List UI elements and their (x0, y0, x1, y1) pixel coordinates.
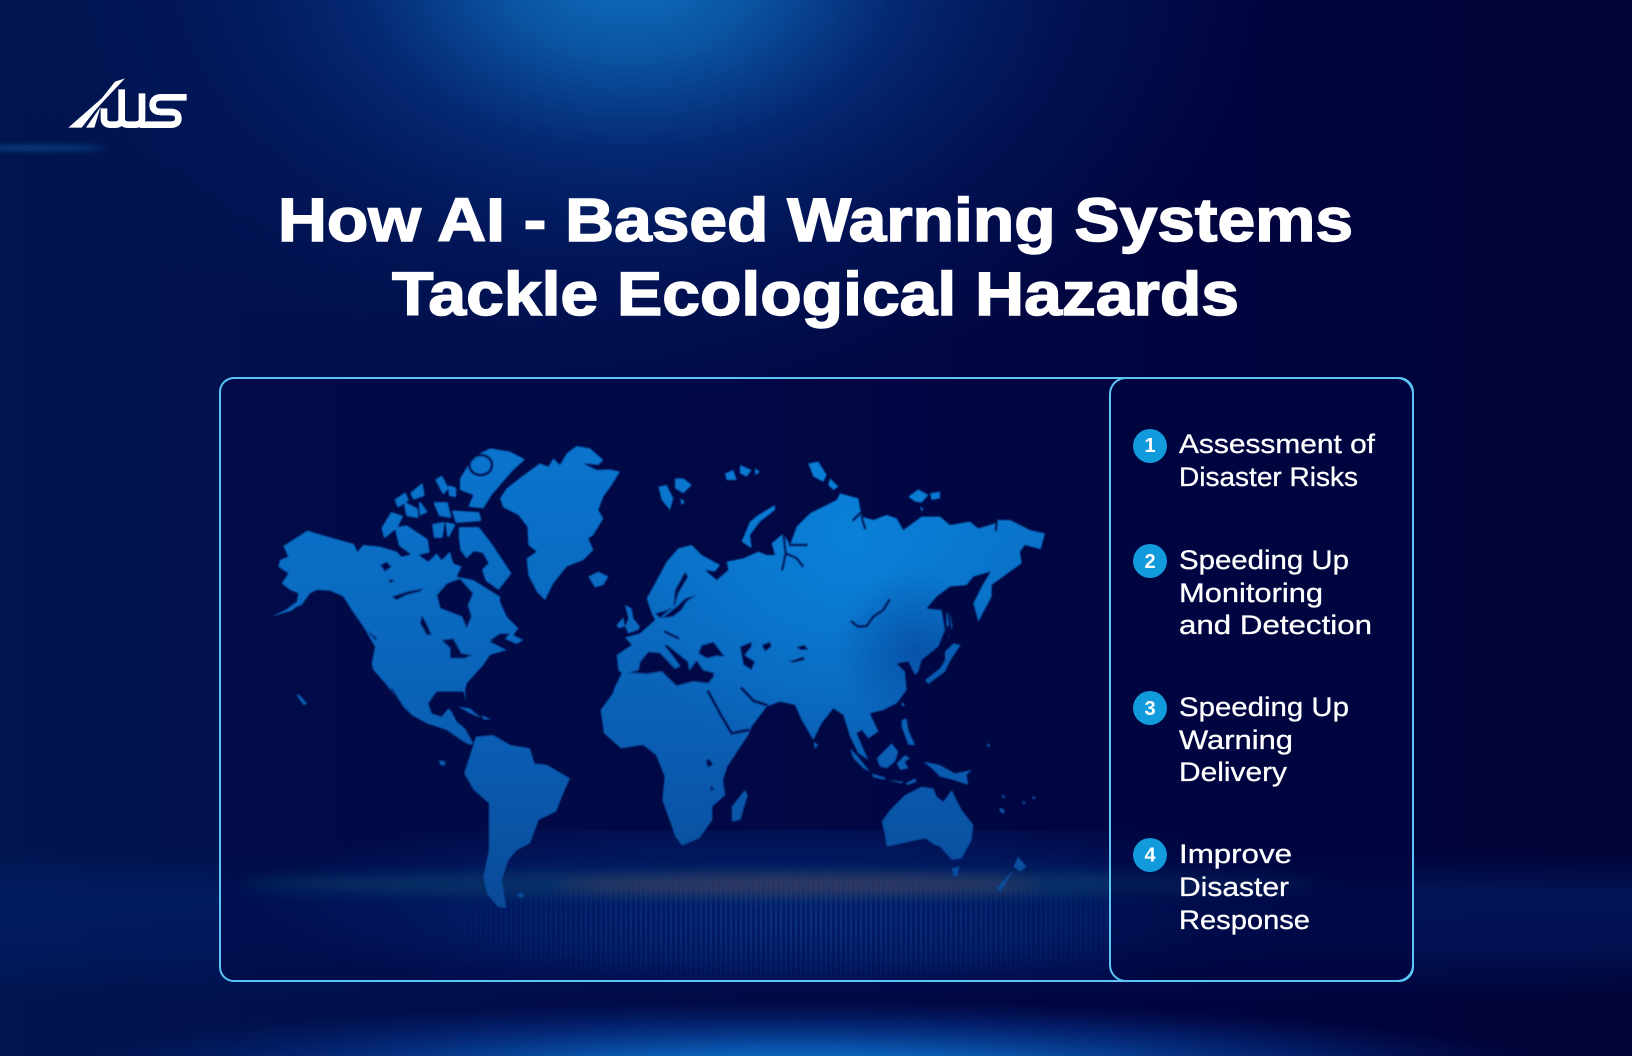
item 4: Disaster (1179, 872, 1289, 902)
item 2: Monitoring (1179, 578, 1323, 608)
item 4: Improve (1179, 839, 1292, 869)
item 1: Assessment of (1179, 429, 1376, 459)
item 2: and Detection (1179, 610, 1372, 640)
item 4: 4 (1144, 844, 1156, 866)
panel: numbered list (1110, 378, 1413, 981)
title (278, 186, 1353, 328)
panel: world map frame (220, 378, 1413, 981)
title: How AI - Based Warning Systems (278, 186, 1353, 254)
item 3: 3 (1144, 698, 1156, 720)
world map (272, 445, 1046, 909)
item 2: Speeding Up (1179, 545, 1349, 575)
item 4: Response (1179, 905, 1310, 935)
horizon glow (252, 830, 1289, 980)
item 3: Delivery (1179, 757, 1288, 787)
title: Tackle Ecological Hazards (392, 260, 1239, 328)
item 1 (1133, 429, 1376, 492)
item 3: Speeding Up (1179, 692, 1349, 722)
item 4 (1133, 838, 1310, 935)
item 2 (1133, 544, 1372, 640)
logo letters WS (104, 89, 187, 125)
item 2: 2 (1144, 551, 1156, 573)
icon: rocket swoosh (68, 78, 125, 128)
logo (68, 78, 187, 128)
item 1: Disaster Risks (1179, 462, 1358, 492)
item 1: 1 (1144, 435, 1156, 457)
item 3 (1133, 691, 1349, 787)
item 3: Warning (1179, 725, 1293, 755)
